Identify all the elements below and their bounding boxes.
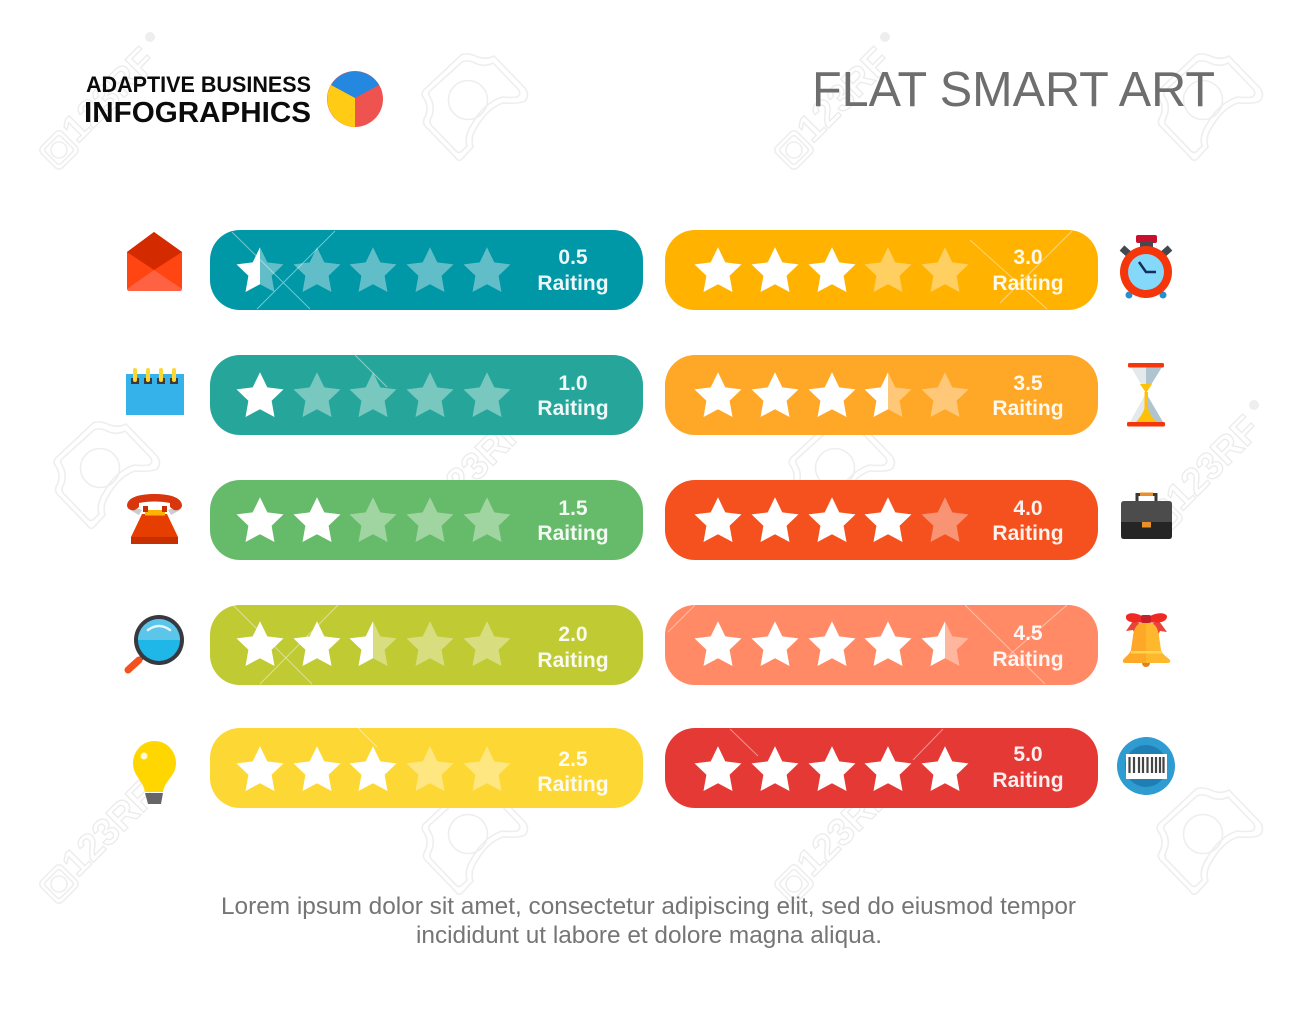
rating bar 5.0 xyxy=(665,728,1098,808)
icon: barcode xyxy=(1117,737,1175,795)
rating bar 1.0: Raiting xyxy=(537,397,609,420)
text: 123RF xyxy=(423,408,534,519)
icon: notebook xyxy=(126,368,184,415)
icon: alarm clock xyxy=(1120,235,1172,298)
rating bar 1.0: 1.0 xyxy=(558,372,588,395)
rating bar 1.0 xyxy=(210,355,643,435)
rating bar 4.5: Raiting xyxy=(992,648,1064,671)
rating bar 1.5: Raiting xyxy=(537,522,609,545)
rating bar 2.5: Raiting xyxy=(537,773,609,796)
rating bar 2.0: Raiting xyxy=(537,649,609,672)
icon: briefcase xyxy=(1121,492,1172,539)
text: 123RF xyxy=(54,774,165,885)
rating bar 4.5: 4.5 xyxy=(1013,622,1043,645)
title: FLAT SMART ART xyxy=(812,63,1215,117)
logo pie icon xyxy=(327,71,383,127)
rating bar 3.5: Raiting xyxy=(992,397,1064,420)
rating bar 2.5 xyxy=(210,728,643,808)
icon: hourglass xyxy=(1127,363,1165,426)
icon: bell xyxy=(1123,613,1170,667)
rating bar 1.5: 1.5 xyxy=(558,497,588,520)
text: 123RF xyxy=(1158,408,1269,519)
description text: Lorem ipsum dolor sit amet, consectetur adipiscing elit, sed do eiusmod tempor xyxy=(221,893,1076,920)
description text xyxy=(221,893,1076,949)
rating bar 2.5: 2.5 xyxy=(558,748,588,771)
rating bar 0.5: Raiting xyxy=(537,272,609,295)
rating bar 3.5 xyxy=(665,355,1098,435)
icon: magnifier xyxy=(128,615,184,670)
rating bar 3.0 xyxy=(665,230,1098,310)
rating bar 5.0: Raiting xyxy=(992,769,1064,792)
rating bar 0.5: 0.5 xyxy=(558,246,588,269)
rating bar 2.0: 2.0 xyxy=(558,623,588,646)
text: 123RF xyxy=(789,774,900,885)
icon: light bulb xyxy=(133,741,176,804)
rating bar 4.5 xyxy=(665,605,1098,685)
logo heading xyxy=(84,72,311,129)
rating bar 4.0 xyxy=(665,480,1098,560)
rating bar 4.0: 4.0 xyxy=(1013,497,1043,520)
rating bar 5.0: 5.0 xyxy=(1013,743,1043,766)
icon: envelope xyxy=(127,232,182,291)
rating bar 4.0: Raiting xyxy=(992,522,1064,545)
logo heading: INFOGRAPHICS xyxy=(84,97,311,129)
rating bar 3.0: 3.0 xyxy=(1013,246,1043,269)
description text: incididunt ut labore et dolore magna aliqua. xyxy=(416,922,882,949)
rating bar 0.5 xyxy=(210,230,643,310)
text: 123RF xyxy=(54,40,165,151)
rating bar 3.0: Raiting xyxy=(992,272,1064,295)
text: 123RF xyxy=(789,40,900,151)
icon: telephone xyxy=(127,494,182,544)
rating bar 2.0 xyxy=(210,605,643,685)
rating bar 1.5 xyxy=(210,480,643,560)
rating bar 3.5: 3.5 xyxy=(1013,372,1043,395)
logo heading: ADAPTIVE BUSINESS xyxy=(86,72,311,97)
